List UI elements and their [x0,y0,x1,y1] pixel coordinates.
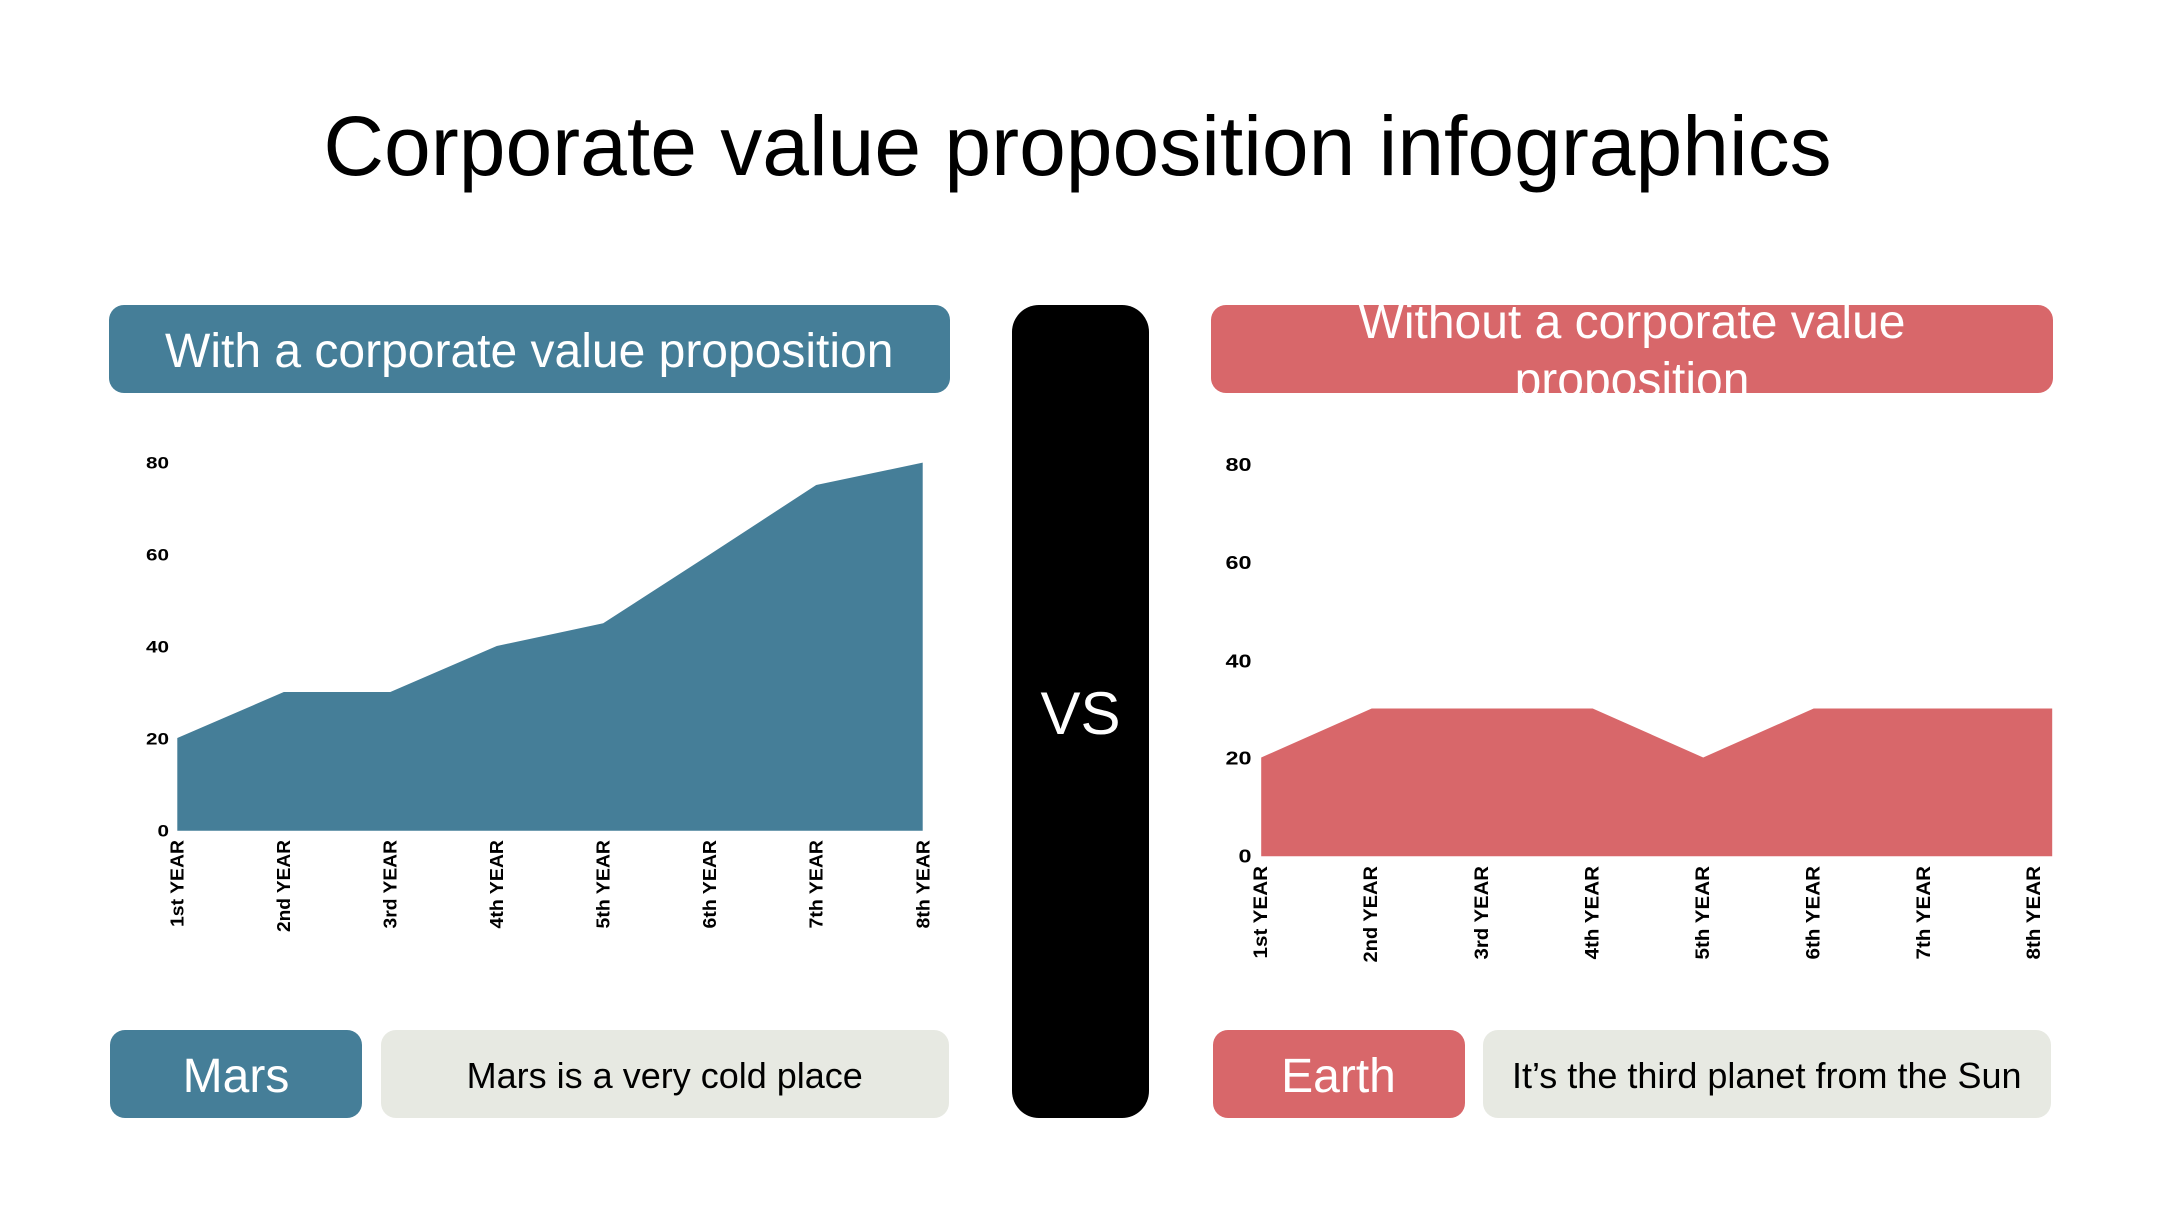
description: Mars: Mars is a very cold place [467,1054,863,1096]
y axis labels: right chart: 20 [1226,748,1252,768]
description: Earth [1482,1030,2051,1118]
y axis labels: left chart [146,454,169,840]
x axis labels: left chart: 3rd YEAR [380,840,400,928]
x axis labels: right chart: 6th YEAR [1802,866,1824,960]
x axis labels: left chart: 7th YEAR [806,840,826,928]
y axis labels: right chart [1226,454,1252,866]
y axis labels: left chart: 0 [158,822,169,840]
x axis labels: left chart: 6th YEAR [699,840,720,928]
y axis labels: left chart: 60 [146,546,169,564]
x axis labels: right chart: 5th YEAR [1692,866,1714,960]
VS divider [1012,305,1149,1118]
x axis labels: left chart: 1st YEAR [166,840,188,927]
x axis labels: left chart [166,840,934,932]
x axis labels: right chart: 7th YEAR [1913,866,1935,960]
y axis labels: left chart: 80 [146,454,169,472]
title: Corporate value proposition infographics [323,99,1832,193]
label: Earth: Earth [1281,1050,1396,1102]
header: without a corporate value proposition [1211,305,2053,393]
y axis labels: right chart: 40 [1226,650,1252,672]
y axis labels: right chart: 80 [1226,454,1252,475]
label: Mars: Mars [183,1050,289,1102]
description: Earth: It’s the third planet from the Sun [1512,1054,2022,1096]
y axis labels: right chart: 0 [1238,846,1252,866]
description: Mars [380,1030,949,1118]
label: Mars [110,1030,362,1118]
label: Earth [1212,1030,1464,1118]
x axis labels: left chart: 2nd YEAR [273,840,294,932]
x axis labels: right chart: 4th YEAR [1582,866,1604,960]
y axis labels: left chart: 20 [146,730,169,748]
x axis labels: right chart: 2nd YEAR [1360,866,1382,962]
y axis labels: left chart: 40 [146,638,169,656]
x axis labels: right chart: 3rd YEAR [1471,866,1493,960]
x axis labels: left chart: 8th YEAR [912,840,934,928]
y axis labels: right chart: 60 [1226,552,1252,573]
header: with a corporate value proposition: With a corporate value proposition [165,324,893,378]
x axis labels: right chart: 1st YEAR [1250,866,1272,958]
area: blue series [177,463,923,831]
x axis labels: right chart: 8th YEAR [2023,866,2045,960]
x axis labels: right chart [1250,866,2045,962]
x axis labels: left chart: 5th YEAR [592,840,614,928]
VS divider: VS [1040,680,1121,746]
header: with a corporate value proposition [108,305,950,393]
area: red series [1261,708,2052,856]
x axis labels: left chart: 4th YEAR [486,840,507,928]
